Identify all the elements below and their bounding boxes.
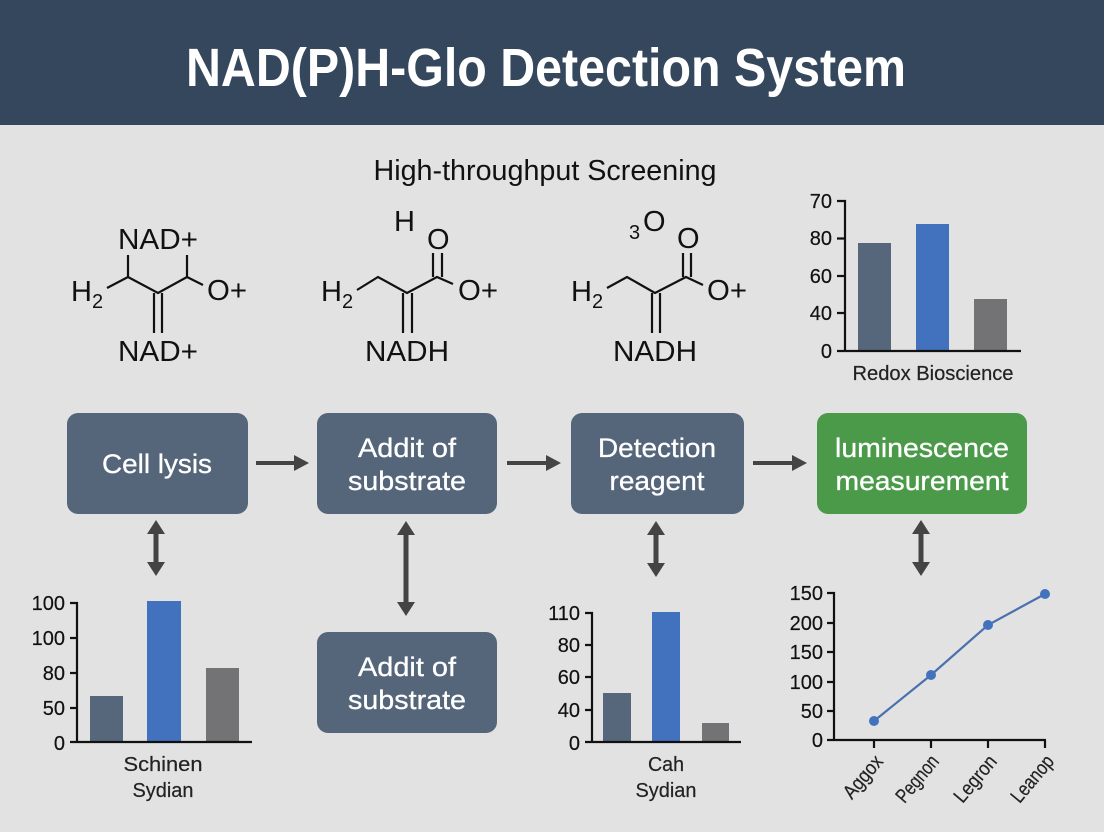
- subtitle: High-throughput Screening: [374, 155, 716, 187]
- bar chart: Schinen Sydian: 50: [43, 698, 65, 720]
- bar chart: Schinen Sydian: Sydian: [132, 780, 194, 802]
- step: luminescence measurement: measurement: [836, 466, 1009, 496]
- line chart: luminescence: 100: [790, 672, 823, 694]
- bar chart: Cah Sydian: 60: [558, 667, 580, 689]
- line chart: luminescence: 50: [801, 701, 823, 723]
- molecule: NADH structure with 3O: O: [677, 223, 700, 255]
- line chart: luminescence: Aggox: [839, 751, 888, 804]
- step: second Addit of substrate: [317, 632, 497, 733]
- arrow: substrate to detection: [507, 455, 561, 471]
- bar chart: Schinen Sydian: 100: [32, 628, 65, 650]
- bar chart: Cah Sydian: 0: [569, 733, 580, 755]
- header banner: [0, 0, 1104, 125]
- bar chart: Schinen Sydian: Schinen: [124, 754, 202, 776]
- bar chart: Redox Bioscience: Redox Bioscience: [852, 363, 1014, 385]
- bar chart: Schinen Sydian: 100: [32, 593, 65, 615]
- step: Cell lysis: [67, 413, 248, 514]
- arrow: detection to luminescence: [753, 455, 807, 471]
- molecule: NADH structure with 3O: [571, 206, 747, 368]
- bar chart: Cah Sydian: 80: [558, 635, 580, 657]
- line chart: luminescence: Legron: [950, 751, 1002, 807]
- molecule: NAD+ structure: O+: [207, 275, 247, 307]
- bar chart: Redox Bioscience: 80: [810, 228, 832, 250]
- molecule: NADH structure with H: O: [427, 224, 450, 256]
- molecule: NADH structure with 3O: O+: [707, 275, 747, 307]
- molecule: NADH structure with H: 2: [342, 291, 353, 313]
- bar chart: Cah Sydian: 110: [548, 603, 580, 625]
- bar chart: Cah Sydian: Sydian: [636, 780, 696, 802]
- molecule: NADH structure with H: [321, 206, 498, 368]
- step: Cell lysis: Cell lysis: [102, 449, 212, 479]
- line chart: luminescence: Pegnon: [892, 751, 944, 807]
- step: Addit of substrate: [317, 413, 497, 514]
- bar chart: Cah Sydian: 40: [558, 700, 580, 722]
- molecule: NAD+ structure: NAD+: [118, 336, 198, 368]
- step: Addit of substrate: Addit of: [358, 433, 457, 463]
- arrow: lysis to substrate: [256, 455, 309, 471]
- bar chart: Cah Sydian: Cah: [648, 754, 684, 776]
- molecule: NADH structure with 3O: H: [571, 276, 592, 308]
- line chart: luminescence: 150: [790, 583, 823, 605]
- molecule: NAD+ structure: NAD+: [118, 224, 198, 256]
- bar chart: Redox Bioscience: [810, 191, 1021, 385]
- step: luminescence measurement: [817, 413, 1027, 514]
- title: NAD(P)H-Glo Detection System: [186, 38, 906, 98]
- double arrow: luminescence and line chart: [912, 520, 930, 576]
- step: second Addit of substrate: Addit of: [358, 652, 457, 682]
- molecule: NADH structure with H: NADH: [365, 336, 449, 368]
- molecule: NADH structure with H: O+: [458, 275, 498, 307]
- double arrow: lysis and chart: [147, 520, 165, 576]
- molecule: NADH structure with H: H: [321, 276, 342, 308]
- step: Detection reagent: Detection: [598, 433, 716, 463]
- molecule: NADH structure with 3O: 3: [629, 222, 640, 244]
- bar chart: Redox Bioscience: 40: [810, 303, 832, 325]
- line chart: luminescence: 0: [812, 730, 823, 752]
- bar chart: Redox Bioscience: 60: [810, 266, 832, 288]
- molecule: NAD+ structure: 2: [92, 291, 103, 313]
- double arrow: detection and chart: [647, 521, 665, 577]
- bar chart: Redox Bioscience: 0: [821, 341, 832, 363]
- molecule: NADH structure with H: H: [394, 206, 415, 238]
- molecule: NADH structure with 3O: O: [643, 206, 666, 238]
- bar chart: Schinen Sydian: 80: [43, 663, 65, 685]
- line chart: luminescence: [790, 583, 1059, 807]
- step: luminescence measurement: luminescence: [835, 433, 1009, 463]
- bar chart: Schinen Sydian: [32, 593, 252, 802]
- step: second Addit of substrate: substrate: [348, 685, 466, 715]
- bar chart: Schinen Sydian: 0: [54, 733, 65, 755]
- step: Detection reagent: reagent: [610, 466, 705, 496]
- bar chart: Redox Bioscience: 70: [810, 191, 832, 213]
- step: Addit of substrate: substrate: [348, 466, 466, 496]
- bar chart: Cah Sydian: [548, 603, 741, 802]
- double arrow: substrate and second substrate box: [397, 521, 415, 616]
- line chart: luminescence: 150: [790, 642, 823, 664]
- molecule: NAD+ structure: [71, 224, 247, 368]
- line chart: luminescence: Leanop: [1007, 751, 1059, 807]
- molecule: NADH structure with 3O: NADH: [613, 336, 697, 368]
- step: Detection reagent: [571, 413, 744, 514]
- molecule: NADH structure with 3O: 2: [592, 291, 603, 313]
- line chart: luminescence: 200: [790, 613, 823, 635]
- molecule: NAD+ structure: H: [71, 276, 92, 308]
